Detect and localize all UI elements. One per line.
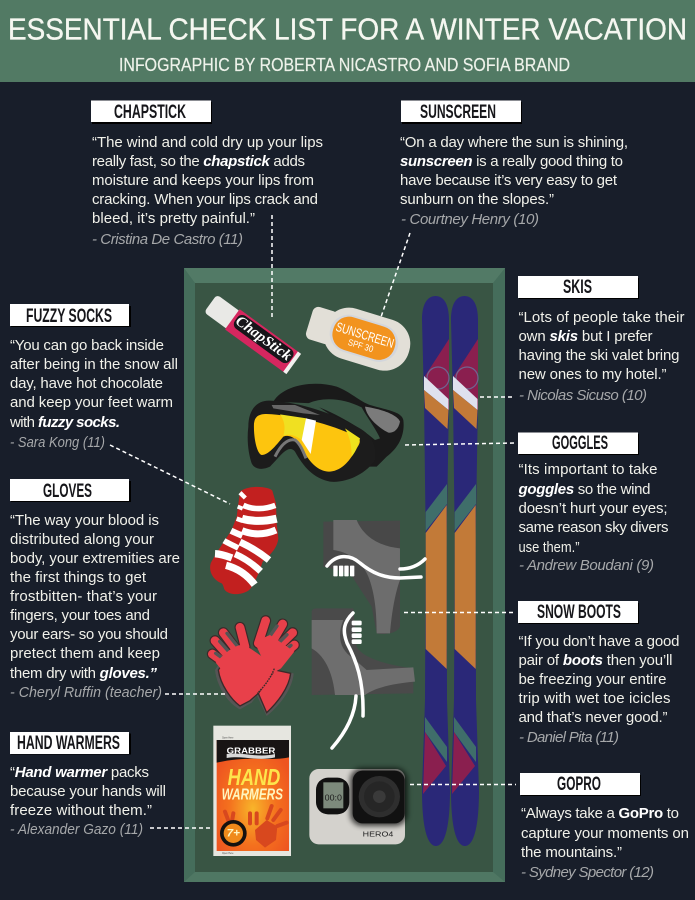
quote: fuzzy socks [9,337,178,451]
quote: gloves: - Cheryl Ruffin (teacher) [10,684,162,701]
heading: hand warmers [10,732,131,754]
quote: gloves: them dry with gloves.” [10,665,158,682]
quote: goggles: doesn’t hurt your eyes; [518,500,668,517]
quote: gloves: fingers, your toes and [10,607,150,624]
heading: snow boots: SNOW BOOTS [537,602,621,623]
heading: fuzzy socks: FUZZY SOCKS [26,306,112,327]
quote: gloves: the first things to get [10,569,147,586]
quote: sunscreen: - Courtney Henry (10) [401,211,539,228]
heading: gopro: GOPRO [557,774,601,795]
subtitle: INFOGRAPHIC BY ROBERTA NICASTRO AND SOFIA BRAND [119,55,570,75]
quote: snow boots: pair of boots then you’ll [518,652,672,669]
quote: gloves: distributed along your [10,531,154,548]
icon: gopro camera [309,768,407,844]
quote: fuzzy socks: day, have hot chocolate [10,375,163,392]
icon: sunscreen: SPF 30 [347,337,375,354]
quote: gloves: frostbitten- that’s your [10,588,157,605]
quote: gloves: pretect them and keep [10,645,160,662]
dashed connector: snow boots [404,612,516,614]
panel: hand warmers [10,732,166,838]
quote: hand warmers: “Hand warmer packs [10,764,149,781]
quote: chapstick [92,134,323,248]
quote: skis: - Nicolas Sicuso (10) [519,387,647,404]
dashed connector: fuzzy socks [110,445,230,504]
heading: fuzzy socks [10,304,131,327]
heading: gloves [10,479,131,502]
quote: hand warmers [10,764,166,838]
quote: sunscreen: sunscreen is a really good thing to [400,153,623,170]
dashed connector: goggles [405,443,516,445]
quote: goggles: “Its important to take [518,461,658,478]
quote: chapstick: moisture and keeps your lips from [92,172,314,189]
dashed connector: hand warmers [150,827,210,829]
quote: skis: own skis but I prefer [518,328,652,345]
icon: front glove [212,627,275,693]
quote: snow boots [518,633,680,746]
icon: left ski [422,296,450,846]
quote: fuzzy socks: with fuzzy socks. [9,414,120,431]
quote: gloves: “The way your blood is [10,512,159,529]
quote: gopro: capture your moments on [521,825,689,842]
icon: snow boots [312,520,425,748]
icon: hand warmers pack: HAND [228,764,280,790]
quote: gloves: body, your extremities are [10,550,180,567]
quote: goggles: goggles so the wind [518,481,650,498]
dashed connector: sunscreen [381,233,410,317]
icon: gloves [212,621,294,716]
icon: hand warmers pack: Open Here [222,737,234,740]
icon: hand warmers pack: Open Here [222,852,234,855]
quote: skis: having the ski valet bring [518,347,680,364]
quote: skis [518,309,684,404]
panel: skis [518,276,684,404]
quote: snow boots: “If you don’t have a good [518,633,680,650]
panel: gopro [520,773,689,881]
quote: hand warmers: - Alexander Gazo (11) [10,821,143,838]
quote: gopro: “Always take a GoPro to [521,805,679,822]
quote: fuzzy socks: - Sara Kong (11) [10,434,105,451]
quote: hand warmers: because your hands will [10,783,166,800]
dashed connector: chapstick [271,215,273,317]
icon: right ski [451,296,479,846]
heading: sunscreen: SUNSCREEN [420,102,496,123]
quote: skis: “Lots of people take their [518,309,684,326]
icon: back glove [215,621,294,716]
heading: chapstick [91,100,212,124]
heading: goggles: GOGGLES [552,433,608,454]
dashed connector: gloves [165,693,225,695]
heading: skis: SKIS [563,277,592,298]
quote: sunscreen: “On a day where the sun is shining, [400,134,628,151]
icon: hand warmers pack: GRABBER [227,745,276,755]
quote: fuzzy socks: after being in the snow all [10,356,178,373]
quote: chapstick: bleed, it’s pretty painful.” [92,210,255,227]
panel: fuzzy socks [9,304,178,451]
heading: chapstick: CHAPSTICK [114,102,186,123]
panel: goggles [518,432,668,574]
quote: gopro: - Sydney Spector (12) [521,864,654,881]
heading: goggles [518,432,639,455]
icon: sunscreen: SUNSCREEN [334,319,396,351]
heading: hand warmers: HAND WARMERS [17,733,120,754]
quote: gopro: the mountains.” [521,844,622,861]
icon: gopro camera: HERO4 [363,830,393,839]
dashed connector: skis [480,396,512,398]
quote: snow boots: be freezing your entire [518,671,666,688]
quote: goggles [518,461,668,574]
quote: skis: new ones to my hotel.” [518,366,666,383]
header banner [0,0,695,82]
icon: lower boot [312,608,415,695]
quote: hand warmers: freeze without them.” [10,802,152,819]
icon: hand warmers pack [213,726,291,856]
panel: chapstick [91,100,323,248]
quote: goggles: - Andrew Boudani (9) [519,557,654,574]
quote: snow boots: - Daniel Pita (11) [519,729,619,746]
quote: goggles: same reason sky divers [518,519,668,536]
icon: hand warmers pack: 7+ [227,828,240,840]
heading: skis [518,276,639,299]
icon: boot laces [327,557,425,748]
panel: snow boots [518,601,680,746]
dashed connector: gopro [410,784,516,786]
quote: sunscreen: sunburn on the slopes.” [400,191,554,208]
quote: chapstick: cracking. When your lips crack and [92,191,318,208]
quote: fuzzy socks: “You can go back inside [10,337,164,354]
icon: fuzzy socks [210,487,278,594]
panel: gloves [10,479,180,701]
quote: goggles: use them.” [518,539,580,556]
icon: skis [422,296,479,846]
heading: gopro [520,773,641,796]
panel: tray [184,268,505,882]
icon: sunscreen [302,297,417,377]
quote: sunscreen [400,134,628,228]
quote: gloves: your ears- so you should [10,626,168,643]
quote: snow boots: and that’s never good.” [518,709,668,726]
heading: sunscreen [401,100,522,124]
quote: chapstick: - Cristina De Castro (11) [92,231,243,248]
quote: chapstick: really fast, so the chapstick adds [92,153,305,170]
icon: gopro camera: 00:0 [325,794,343,803]
quote: gopro [521,805,689,881]
icon: hand warmers pack: WARMERS [222,786,284,803]
quote: chapstick: “The wind and cold dry up your lips [92,134,323,151]
quote: gloves [10,512,180,701]
quote: fuzzy socks: and keep your feet warm [10,394,173,411]
icon: upper boot [323,520,400,634]
quote: snow boots: trip with wet toe icicles [518,690,670,707]
panel: sunscreen [400,100,628,228]
heading: snow boots [518,601,639,624]
icon: chapstick [203,293,301,374]
quote: sunscreen: have because it’s very easy to get [400,172,618,189]
icon: goggles [248,384,404,482]
heading: gloves: GLOVES [43,481,92,502]
icon: chapstick: ChapStick [232,313,295,365]
